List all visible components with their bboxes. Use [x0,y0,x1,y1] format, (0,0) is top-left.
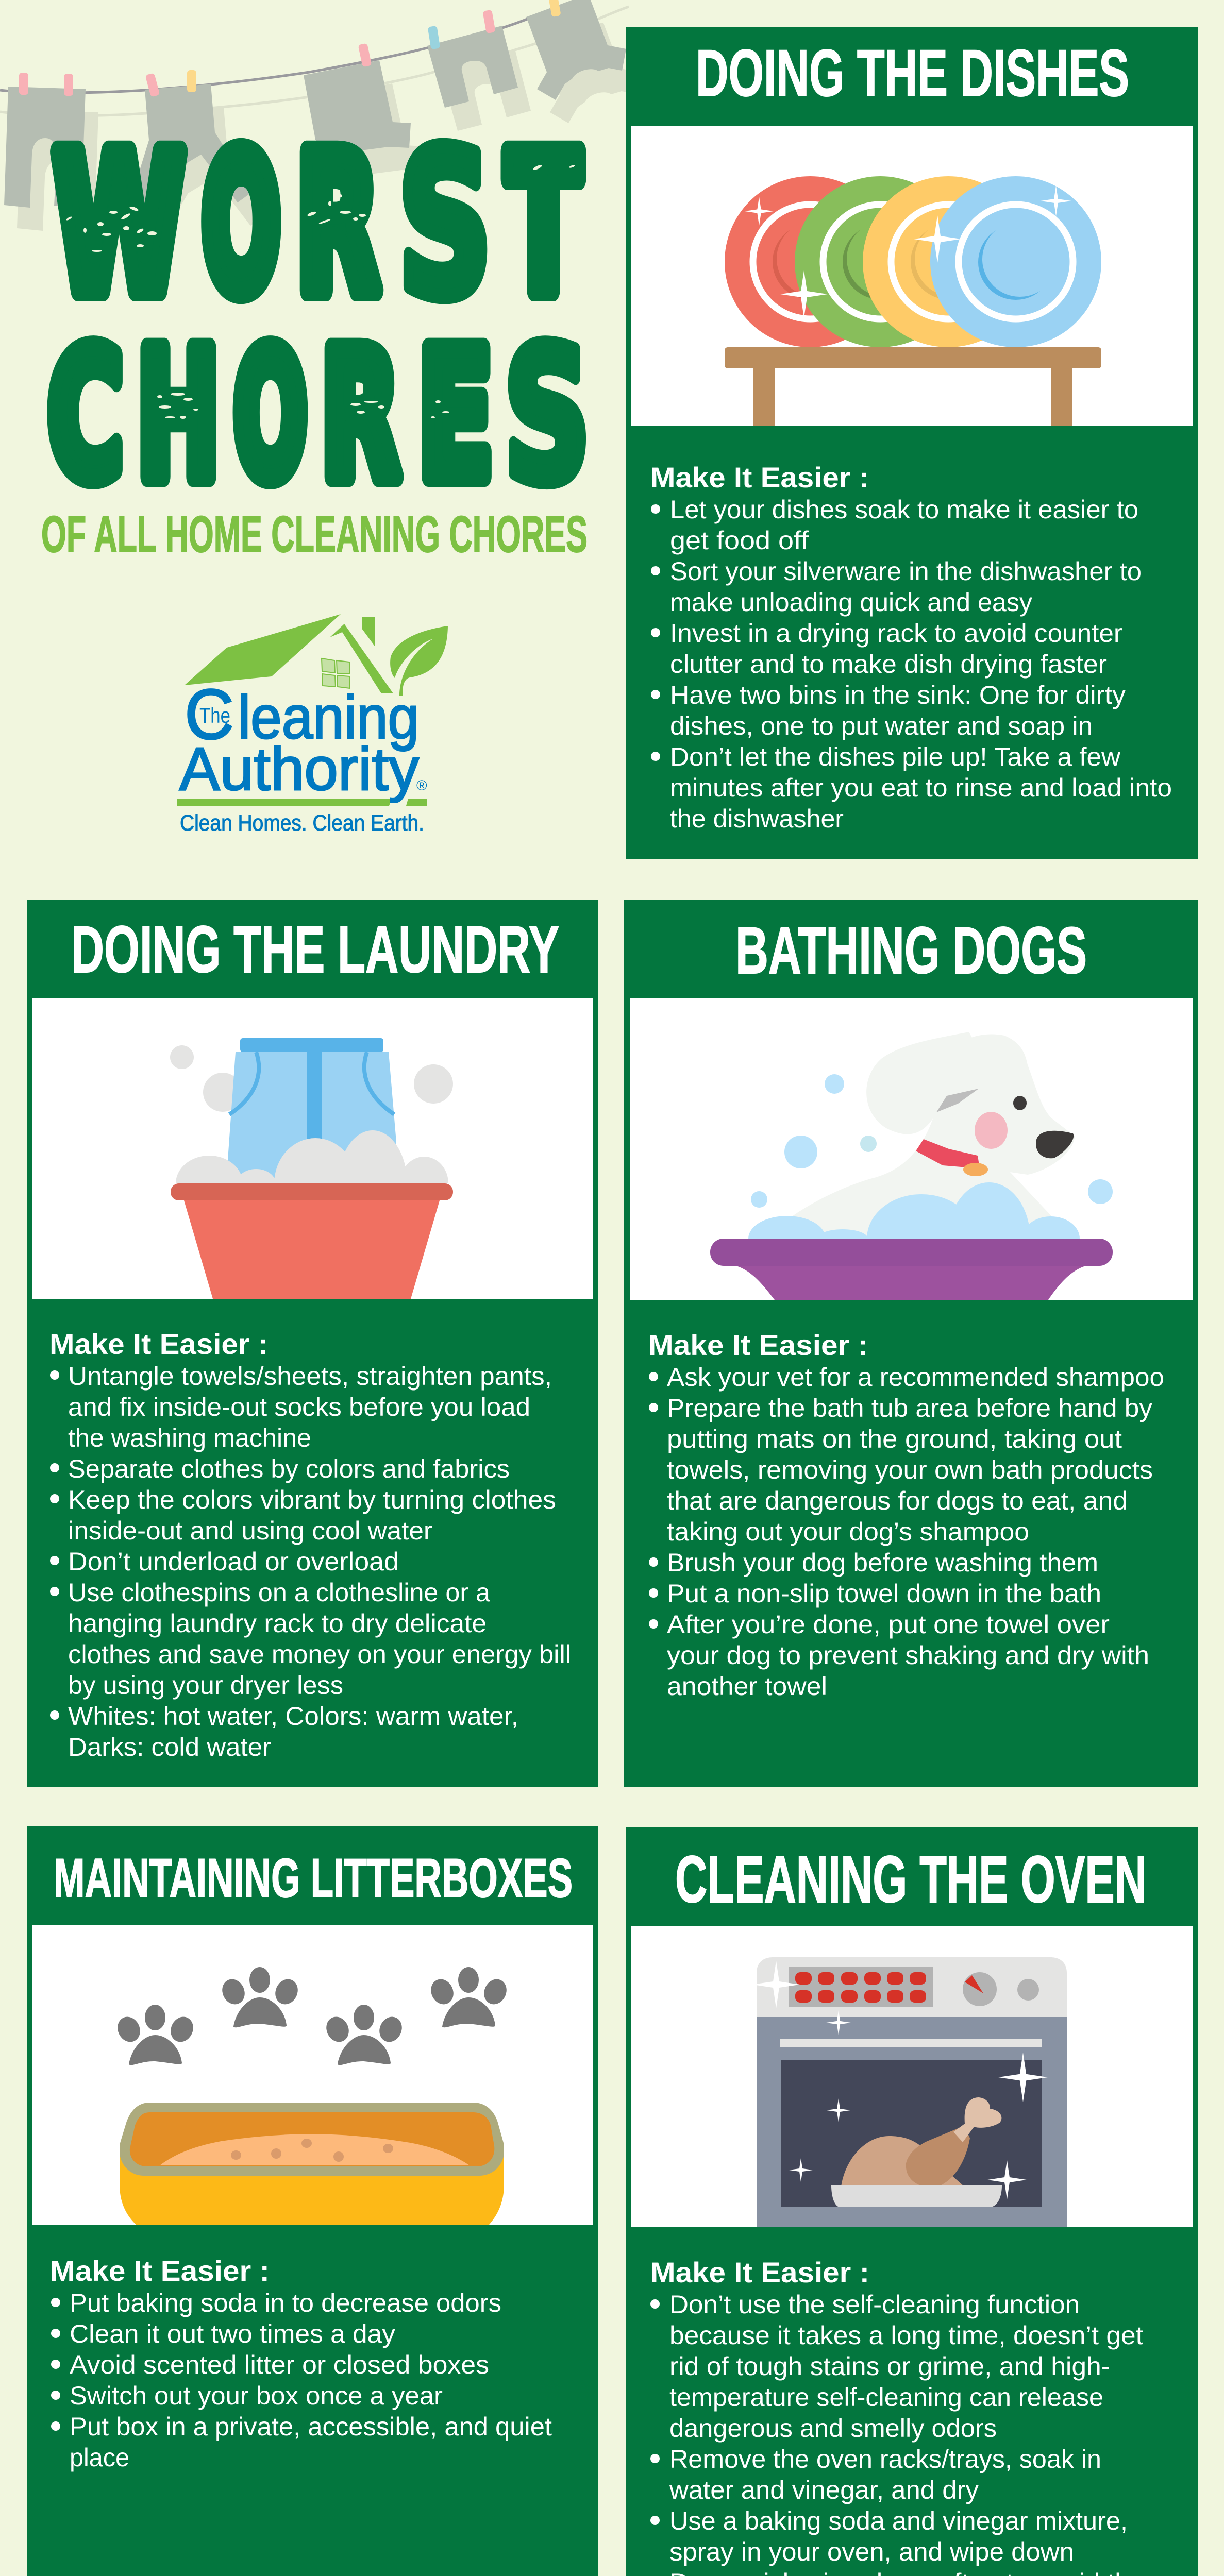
tips: dishes: Have two bins in the sink: One for dirty [670,681,1126,709]
title: worst chores: H [137,313,220,518]
subtitle: OF ALL HOME CLEANING CHORES [41,505,588,563]
illustration: paw prints and litter box [113,1967,511,2225]
logo: the cleaning authority: Authority [179,735,419,803]
panel: maintaining litterboxes [27,1826,598,2576]
panel: bathing dogs [624,900,1198,1787]
tips: oven: Don’t use the self-cleaning function [669,2290,1080,2319]
tips: dishes: Sort your silverware in the dishwasher to [670,557,1142,586]
tips: dogs: Put a non-slip towel down in the bath [667,1579,1101,1608]
tips: dogs: Brush your dog before washing them [667,1548,1098,1577]
tips: laundry: Untangle towels/sheets, straighten pants, [68,1362,552,1391]
illustration: oven with roast turkey [752,1957,1067,2228]
logo: the cleaning authority: leaning [238,684,419,752]
tips: dishes: Let your dishes soak to make it easier to [670,495,1138,524]
tips: laundry: Darks: cold water [68,1733,271,1761]
tips: dogs: Make It Easier : [648,1329,868,1361]
tips: dogs: After you’re done, put one towel over [667,1610,1110,1639]
tips: dishes: dishes, one to put water and soap in [670,711,1093,740]
tips: dishes: the dishwasher [670,804,844,833]
tips: litterboxes: Make It Easier : [50,2255,270,2287]
title: worst chores: R [296,114,379,335]
tips: laundry: Don’t underload or overload [68,1547,399,1576]
tips: laundry: hanging laundry rack to dry delicate [68,1609,487,1638]
tips: dogs: towels, removing your own bath products [667,1455,1153,1484]
tips: dogs: another towel [667,1672,827,1701]
tips: dogs: that are dangerous for dogs to eat, and [667,1486,1128,1515]
tips: oven [650,2256,1145,2576]
tips: laundry: Whites: hot water, Colors: warm water, [68,1702,518,1731]
title: worst chores: W [54,114,185,335]
tips: oven: Make It Easier : [650,2256,869,2289]
title: worst chores: S [504,309,590,523]
logo: the cleaning authority: C [185,675,234,754]
tips: dogs: Ask your vet for a recommended shampoo [667,1363,1164,1392]
tips: laundry [49,1328,571,1761]
tips: dogs: Prepare the bath tub area before hand by [667,1394,1152,1422]
panel: cleaning the oven [626,1827,1198,2576]
tips: dogs [648,1329,1164,1701]
tips: dishes: Make It Easier : [650,461,869,494]
tips: oven: rid of tough stains or grime, and high- [669,2352,1110,2381]
tips: oven: water and vinegar, and dry [669,2476,979,2504]
tips: oven: temperature self-cleaning can release [669,2383,1103,2412]
tips: laundry: Use clothespins on a clothesline or a [68,1578,490,1607]
tips: litterboxes: place [70,2443,129,2472]
tips: dogs: putting mats on the ground, taking out [667,1425,1122,1453]
tips: litterboxes: Put box in a private, accessible, and quiet [70,2412,552,2441]
tips: oven: Use a baking soda and vinegar mixture, [669,2506,1128,2535]
title: worst chores: O [202,114,280,335]
panel: doing the laundry [27,900,598,1787]
logo: the cleaning authority [177,614,448,836]
logo: the cleaning authority: ® [416,777,427,793]
tips: litterboxes: Switch out your box once a year [70,2381,443,2410]
tips: litterboxes: Clean it out two times a day [70,2319,395,2348]
tips: dogs: your dog to prevent shaking and dry with [667,1641,1149,1670]
heading: maintaining litterboxes: MAINTAINING LITTERBOXES [54,1847,573,1909]
tips: litterboxes: Avoid scented litter or closed boxes [70,2350,489,2379]
title: worst chores: R [321,313,400,518]
title: worst chores: E [418,313,493,518]
heading: doing the laundry: DOING THE LAUNDRY [71,913,559,987]
clothesline with hanging laundry [0,0,639,236]
tips: laundry: the washing machine [68,1423,311,1452]
tips: laundry: Make It Easier : [49,1328,268,1360]
tips: laundry: Separate clothes by colors and fabrics [68,1454,510,1483]
illustration: dog in tub [710,1032,1113,1300]
tips: dishes: Don’t let the dishes pile up! Take a few [670,742,1121,771]
tips: laundry: by using your dryer less [68,1671,343,1700]
tips: dogs: taking out your dog’s shampoo [667,1517,1029,1546]
tips: dishes: clutter and to make dish drying faster [670,650,1107,679]
tips: oven: spray in your oven, and wipe down [669,2537,1074,2566]
title: worst chores: O [233,313,307,518]
tips: oven: because it takes a long time, doesn’t get [669,2321,1143,2350]
tips: laundry: and fix inside-out socks before you load [68,1393,530,1421]
illustration: shorts in wash basin [170,1038,453,1299]
title: worst chores [48,109,590,523]
title: worst chores: C [48,313,123,518]
tips: laundry: Keep the colors vibrant by turning clothes [68,1485,556,1514]
logo: the cleaning authority: Clean Homes. Clean Earth. [180,810,424,836]
tips: litterboxes: Put baking soda in to decrease odors [70,2289,501,2317]
title: worst chores: T [507,114,581,335]
tips: laundry: clothes and save money on your energy bill [68,1640,571,1669]
tips: oven: Remove the oven racks/trays, soak in [669,2445,1101,2473]
tips: dishes: Invest in a drying rack to avoid counter [670,619,1122,648]
tips: dishes: get food off [670,526,809,555]
logo: the cleaning authority: The [199,703,230,727]
tips: dishes [650,461,1172,833]
illustration: plates on table [725,176,1101,426]
tips: laundry: inside-out and using cool water [68,1516,432,1545]
tips: dishes: minutes after you eat to rinse and load into [670,773,1172,802]
tips: oven: dangerous and smelly odors [669,2414,997,2443]
tips: dishes: make unloading quick and easy [670,588,1032,617]
title: worst chores: S [398,109,492,341]
panel: doing the dishes [626,27,1198,859]
tips: litterboxes [50,2255,552,2472]
